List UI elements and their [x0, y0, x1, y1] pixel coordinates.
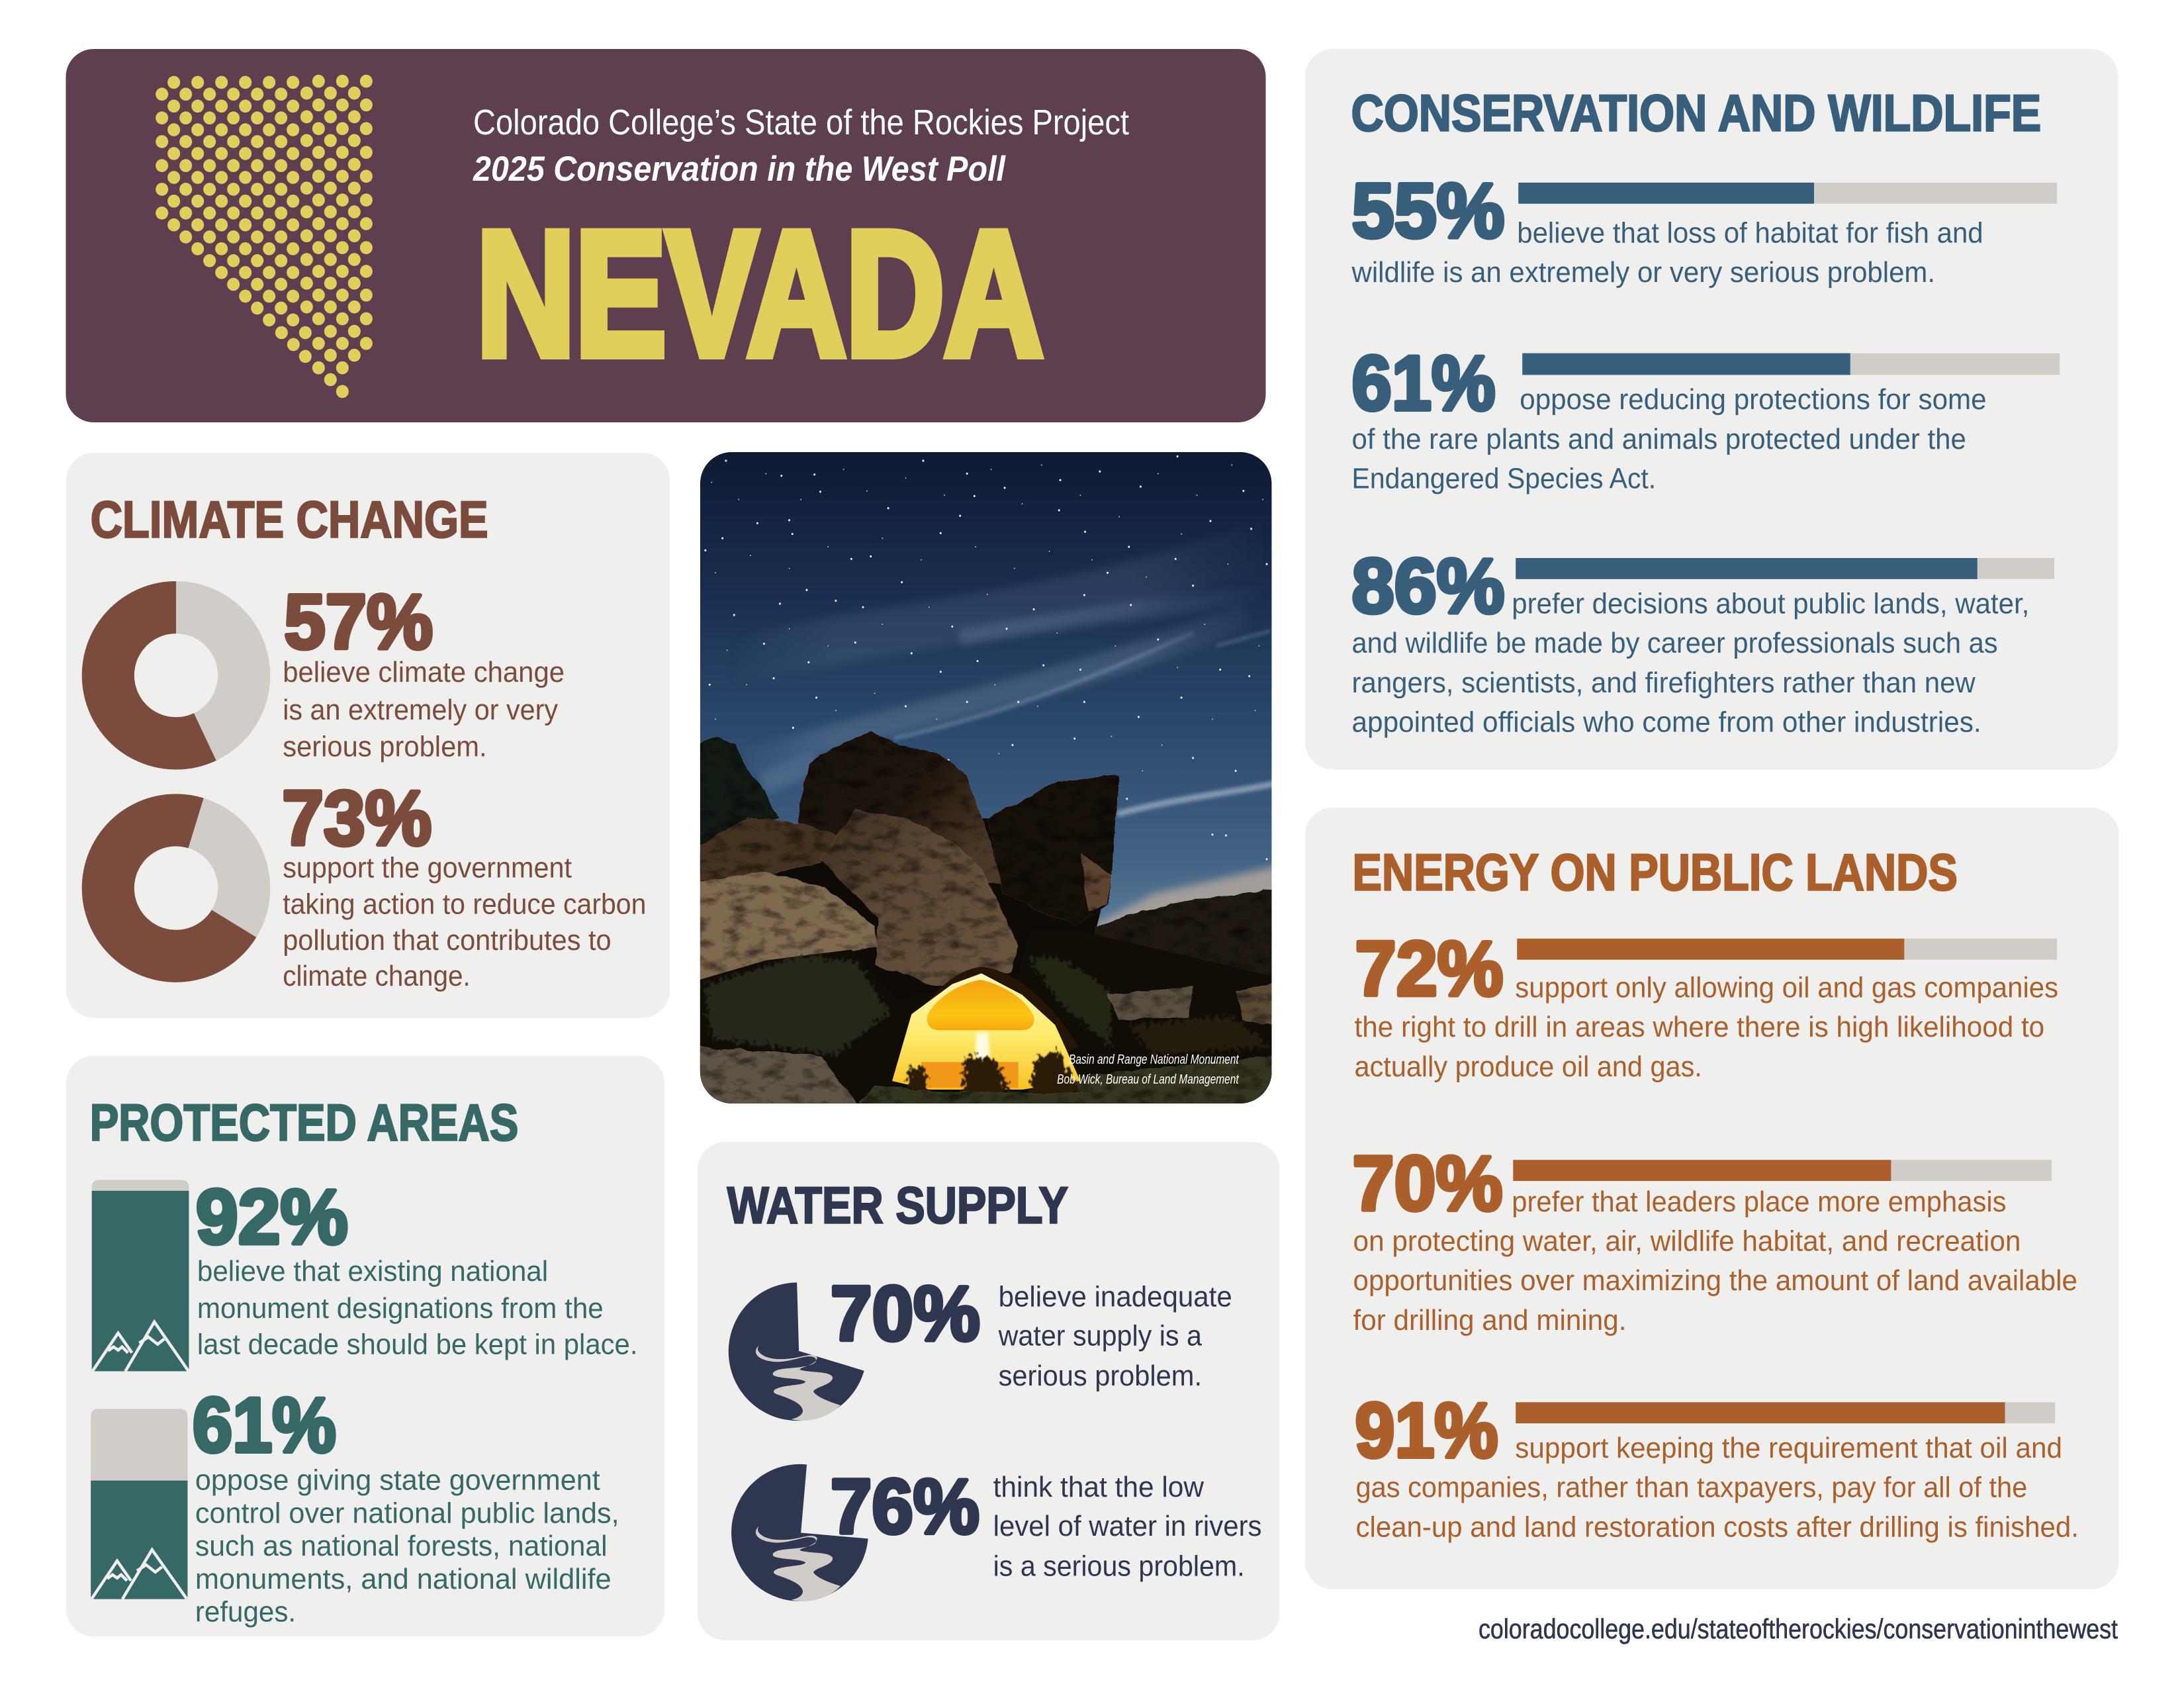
text: 92% description: believe that existing national: [197, 1255, 548, 1288]
text: 76% description: [993, 1471, 1262, 1583]
bar icon: 92% with mountains: [92, 1180, 189, 1371]
stat: 61%: 61%: [193, 1382, 336, 1468]
text: 73% description: [283, 852, 646, 992]
text: 72% description: the right to drill in areas where there is high likelihood to: [1355, 1011, 2044, 1043]
caption: photo credit: Basin and Range National Monument: [1069, 1053, 1240, 1067]
caption: photo credit: Bob Wick, Bureau of Land Management: [1057, 1072, 1240, 1087]
heading: protected areas: PROTECTED AREAS: [90, 1094, 518, 1151]
text: 55% description: [1351, 216, 1983, 289]
text: 61% description: such as national forests, national: [195, 1530, 608, 1562]
text: 61% description: oppose reducing protections for some: [1520, 383, 1987, 416]
subtitle: poll name: 2025 Conservation in the West Poll: [473, 150, 1006, 189]
bar: 55%: [1518, 183, 2057, 204]
heading: energy on public lands: ENERGY ON PUBLIC LANDS: [1353, 844, 1958, 901]
stat: 91%: 91%: [1355, 1387, 1498, 1474]
text: 61% description: of the rare plants and animals protected under the: [1352, 423, 1966, 455]
panel: conservation and wildlife: [1305, 49, 2118, 769]
text: 70% description: on protecting water, air, wildlife habitat, and recreation: [1353, 1225, 2021, 1258]
text: 91% description: clean-up and land restoration costs after drilling is finished.: [1356, 1511, 2079, 1543]
text: 73% description: pollution that contributes to: [283, 924, 612, 957]
text: 72% description: actually produce oil and gas.: [1355, 1051, 1702, 1083]
text: 70% description: believe inadequate: [999, 1281, 1232, 1313]
text: 86% description: and wildlife be made by career professionals such as: [1352, 627, 1998, 659]
text: 76% description: think that the low: [993, 1471, 1204, 1503]
right boulder: [987, 775, 1119, 925]
text: 55% description: believe that loss of habitat for fish and: [1517, 216, 1983, 249]
middle left boulder: [692, 818, 838, 880]
text: 76% description: is a serious problem.: [993, 1550, 1245, 1583]
text: 70% description: serious problem.: [999, 1360, 1202, 1392]
text: 86% description: rangers, scientists, and firefighters rather than new: [1352, 667, 1976, 699]
text: 61% description: Endangered Species Act.: [1352, 463, 1656, 495]
stat: 70%: 70%: [1353, 1140, 1502, 1227]
text: 57% description: [283, 656, 565, 763]
text: 86% description: [1352, 588, 2029, 739]
text: 91% description: [1356, 1432, 2079, 1543]
heading: climate change: CLIMATE CHANGE: [91, 491, 488, 548]
text: 92% description: last decade should be kept in place.: [197, 1329, 637, 1361]
bar icon: 61% with mountains: [91, 1409, 187, 1599]
tree: [700, 736, 780, 872]
text: 57% description: is an extremely or very: [283, 694, 558, 726]
heading: water supply: WATER SUPPLY: [727, 1177, 1068, 1234]
clouds: [711, 543, 1275, 814]
text: 70% description: opportunities over maximizing the amount of land available: [1353, 1264, 2077, 1297]
center boulder: [820, 810, 1019, 986]
panel: protected areas: [66, 1056, 664, 1636]
text: 70% description: water supply is a: [998, 1319, 1203, 1352]
pie icon: 76% with river: [731, 1464, 868, 1601]
horizon glow: [1097, 862, 1272, 927]
dark backing behind the rocks: [692, 818, 1279, 1111]
stat: 72%: 72%: [1355, 925, 1503, 1011]
icon: dotted Nevada state map: [162, 81, 366, 391]
text: 61% description: [195, 1464, 619, 1628]
text: 70% description: prefer that leaders place more emphasis: [1512, 1186, 2006, 1218]
text: 91% description: gas companies, rather than taxpayers, pay for all of the: [1356, 1472, 2027, 1504]
stat: 55%: 55%: [1352, 167, 1504, 254]
stat: 86%: 86%: [1352, 543, 1504, 630]
bar: 86%: [1516, 558, 2054, 579]
text: 92% description: [197, 1255, 637, 1361]
rear hills: [1095, 889, 1272, 976]
bar: 72%: [1517, 939, 2057, 960]
tent: [929, 966, 1079, 1052]
photo: tent under the stars at Basin and Range National Monument: [692, 452, 1279, 1111]
subtitle: project name: Colorado College’s State of the Rockies Project: [473, 103, 1129, 142]
text: 86% description: prefer decisions about public lands, water,: [1512, 588, 2029, 620]
stat: 61%: 61%: [1352, 340, 1495, 426]
text: 73% description: climate change.: [283, 960, 471, 992]
text: 70% description: for drilling and mining.: [1353, 1304, 1626, 1336]
text: 73% description: taking action to reduce carbon: [283, 888, 646, 920]
stat: 76%: 76%: [831, 1463, 979, 1550]
text: 76% description: level of water in rivers: [993, 1510, 1262, 1542]
text: 72% description: support only allowing oil and gas companies: [1515, 971, 2058, 1004]
foreground brush: [905, 1051, 1084, 1103]
text: 61% description: oppose giving state government: [195, 1464, 600, 1497]
panel: energy on public lands: [1305, 808, 2119, 1589]
text: 61% description: monuments, and national wildlife: [195, 1563, 612, 1595]
text: 86% description: appointed officials who come from other industries.: [1352, 706, 1981, 739]
text: 55% description: wildlife is an extremely or very serious problem.: [1351, 256, 1935, 289]
caption: photo credit: [1057, 1053, 1240, 1087]
text: 57% description: serious problem.: [283, 731, 487, 763]
text: 72% description: [1355, 971, 2058, 1083]
brush and ground: [692, 930, 1279, 1111]
donut chart: 73%: [108, 820, 244, 956]
panel: climate change: [66, 453, 670, 1018]
bar: 91%: [1516, 1402, 2055, 1423]
text: 92% description: monument designations from the: [197, 1292, 604, 1325]
header banner: [66, 49, 1265, 422]
text: 70% description: [1353, 1186, 2077, 1336]
title: NEVADA: NEVADA: [477, 194, 1043, 393]
bar: 70%: [1513, 1160, 2052, 1181]
text: 91% description: support keeping the requirement that oil and: [1515, 1432, 2062, 1464]
text: 73% description: support the government: [283, 852, 572, 884]
text: 61% description: control over national public lands,: [195, 1497, 619, 1529]
stat: 92%: 92%: [196, 1173, 348, 1260]
text: 61% description: [1352, 383, 1987, 495]
text: 70% description: [998, 1281, 1232, 1392]
stat: 57%: 57%: [284, 578, 433, 665]
bar: 61%: [1522, 353, 2060, 375]
stars: [705, 457, 1267, 859]
stat: 70%: 70%: [831, 1270, 980, 1356]
panel: water supply: [698, 1142, 1279, 1640]
donut chart: 57%: [108, 608, 244, 743]
back boulder: [797, 732, 1003, 883]
text: 61% description: refuges.: [195, 1596, 296, 1628]
heading: conservation and wildlife: CONSERVATION AND WILDLIFE: [1351, 85, 2041, 142]
stat: 73%: 73%: [282, 774, 432, 861]
pie icon: 70% with river: [729, 1282, 864, 1421]
text: 57% description: believe climate change: [283, 656, 565, 688]
lower left boulder: [692, 872, 877, 986]
